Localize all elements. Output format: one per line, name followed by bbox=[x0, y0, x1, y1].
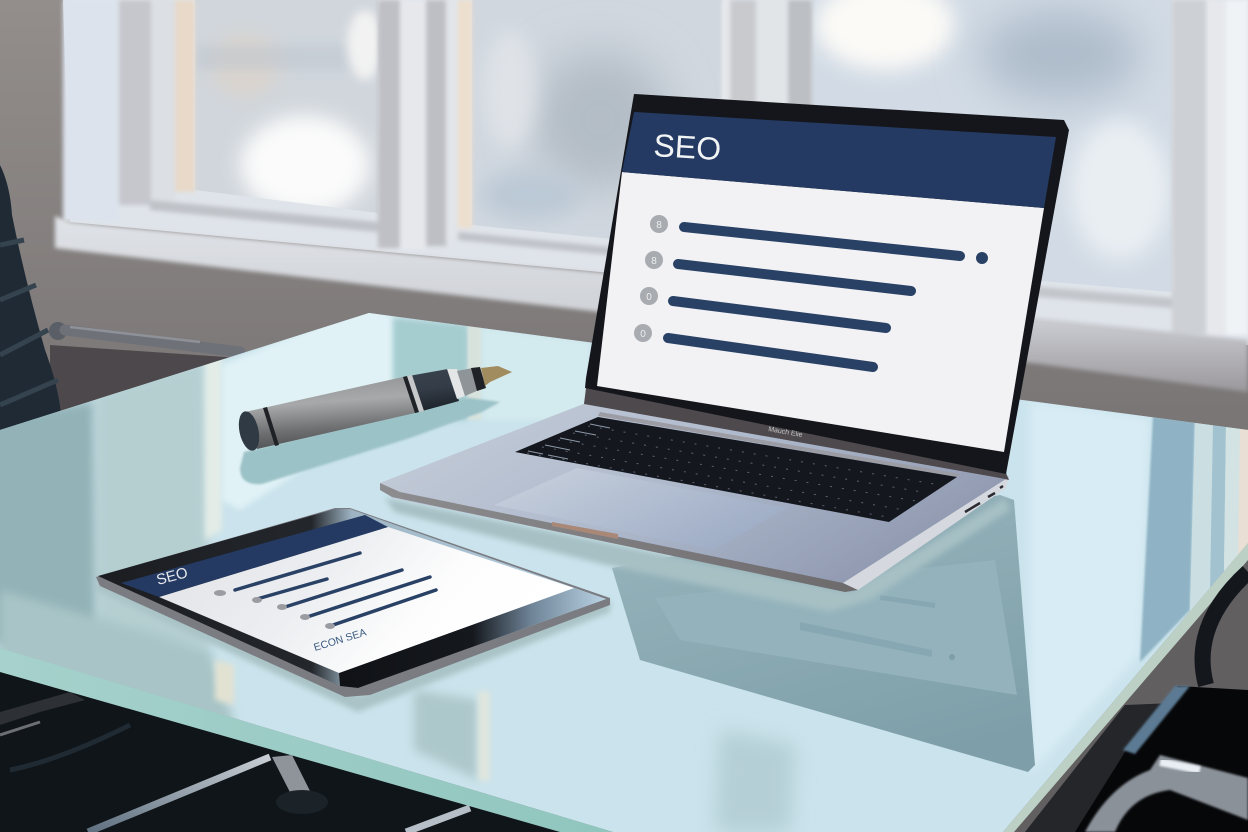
screen header bbox=[622, 112, 1056, 208]
window pane: left bbox=[190, 0, 385, 220]
office chair: left bbox=[0, 165, 240, 445]
list row 3: 0 bbox=[646, 292, 652, 303]
lower frame rails bbox=[150, 200, 378, 232]
shadow behind desk bbox=[32, 345, 240, 425]
window frames bbox=[63, 0, 1248, 335]
pen bbox=[236, 366, 512, 453]
floor and dark area below desk bbox=[0, 552, 1248, 832]
list row 4: 0 bbox=[640, 329, 646, 340]
notch bbox=[552, 522, 618, 539]
chrome band bbox=[1085, 755, 1248, 832]
chair: lower right bbox=[1075, 572, 1248, 832]
ports bbox=[965, 486, 1003, 512]
chair seat bbox=[1075, 686, 1248, 832]
laptop reflection in glass bbox=[385, 495, 1035, 772]
desk right edge bbox=[1003, 543, 1248, 832]
laptop base bbox=[380, 388, 1009, 592]
laptop bbox=[380, 94, 1069, 592]
tablet bbox=[96, 508, 610, 697]
keyboard bbox=[515, 417, 957, 522]
screen title: SEO bbox=[653, 127, 722, 167]
trackpad bbox=[494, 468, 787, 550]
tablet list bbox=[235, 553, 436, 625]
desk front edge bbox=[0, 648, 613, 832]
laptop screen bbox=[597, 112, 1056, 452]
tablet header bbox=[121, 515, 388, 597]
pen reflection bbox=[240, 398, 500, 484]
window pane: middle bbox=[472, 0, 722, 260]
model label: Mauch Elie bbox=[768, 426, 803, 439]
list row 1: 8 bbox=[656, 220, 662, 231]
desk reflections bbox=[0, 305, 1248, 832]
desk glass top bbox=[0, 313, 1248, 832]
chair frame: lower left bbox=[0, 692, 470, 832]
list row 4 bbox=[634, 324, 873, 367]
window sill bbox=[55, 216, 1248, 392]
window pane: right bbox=[812, 0, 1182, 300]
list row 2: 8 bbox=[651, 256, 657, 267]
laptop lid bbox=[585, 94, 1069, 474]
chair arm bbox=[1203, 572, 1248, 685]
tablet title: SEO bbox=[155, 564, 190, 589]
tablet footer: ECON SEA bbox=[312, 627, 368, 654]
tablet screen bbox=[121, 515, 574, 673]
list row 1 bbox=[650, 215, 988, 264]
tablet reflection bbox=[96, 577, 610, 712]
list row 3 bbox=[640, 287, 886, 328]
list row 2 bbox=[645, 251, 911, 291]
window bbox=[63, 0, 1248, 345]
